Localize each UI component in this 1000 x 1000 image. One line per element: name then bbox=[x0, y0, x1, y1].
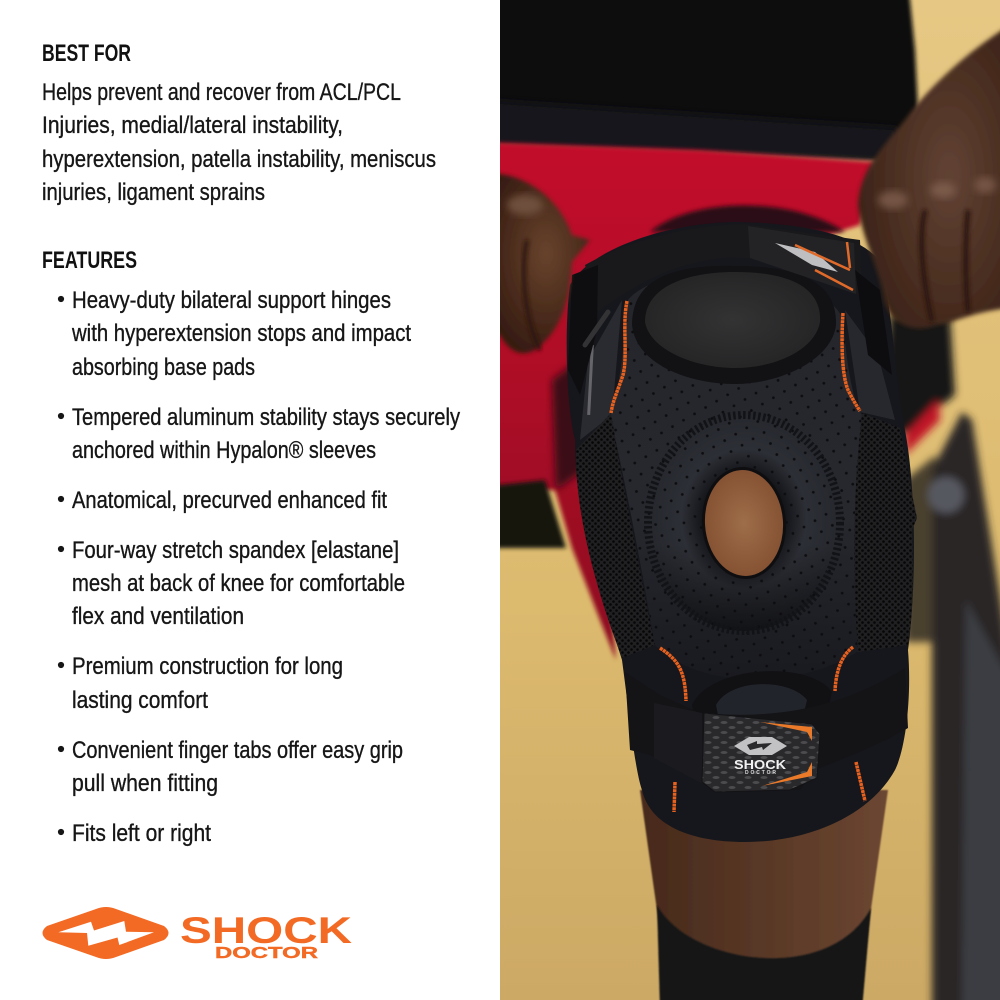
leg: black sock bbox=[657, 905, 871, 1000]
icon: lightning diamond bbox=[42, 907, 168, 959]
feature: finger tabs bbox=[58, 737, 403, 797]
feature: hinges: absorbing base pads bbox=[72, 354, 255, 381]
feature: hinges bbox=[58, 287, 411, 381]
wordmark: shock: SHOCK bbox=[180, 910, 352, 951]
right hand bbox=[858, 25, 1000, 328]
brace: buttress perforation bbox=[647, 415, 841, 631]
panel: white text column bbox=[0, 0, 500, 1000]
feature: spandex mesh: mesh at back of knee for comfortable bbox=[72, 570, 405, 597]
feature: precurved fit: Anatomical, precurved enhanced fit bbox=[72, 487, 387, 514]
brace: buttress shading bbox=[647, 415, 841, 631]
leg: lower leg skin bbox=[640, 790, 888, 975]
background: wood floor bbox=[500, 0, 1000, 1000]
icon: tab diamond bbox=[734, 737, 787, 755]
brace: top logo tab bbox=[748, 226, 856, 294]
background: thigh shadow above brace bbox=[650, 205, 845, 232]
heading: best for: BEST FOR bbox=[42, 40, 131, 67]
brace: patella buttress bbox=[647, 415, 841, 631]
wordmark: doctor: DOCTOR bbox=[215, 945, 318, 962]
tab wordmark: doctor: DOCTOR bbox=[745, 770, 776, 776]
photo: athlete fitting knee brace bbox=[480, 0, 1000, 1000]
background: gym equipment bbox=[880, 315, 1000, 1000]
background: red shorts bbox=[480, 142, 875, 660]
brace: front panel bbox=[610, 272, 862, 679]
list: features bbox=[58, 287, 460, 847]
feature: premium construction bbox=[58, 653, 343, 714]
background: shorts shadow bbox=[552, 360, 584, 490]
tab wordmark: shock: SHOCK bbox=[734, 757, 787, 772]
feature: spandex mesh: flex and ventilation bbox=[72, 603, 244, 630]
text block: best for description: Helps prevent and recover from ACL/PCL bbox=[42, 79, 401, 106]
brace: strap webbing bbox=[654, 703, 703, 784]
feature: hinges: Heavy-duty bilateral support hinges bbox=[72, 287, 391, 314]
logo: Shock Doctor bbox=[42, 907, 352, 962]
text block: best for description: Injuries, medial/lateral instability, bbox=[42, 112, 343, 139]
feature: spandex mesh: Four-way stretch spandex [elastane] bbox=[72, 537, 399, 564]
left hand bbox=[480, 172, 590, 353]
brace: orange stitching bbox=[611, 301, 865, 812]
brace: side panels bbox=[580, 300, 895, 440]
brace: top pad bbox=[632, 266, 836, 384]
feature: aluminum stays: Tempered aluminum stability stays securely bbox=[72, 404, 460, 431]
brace: top strap bbox=[568, 224, 892, 395]
background: dark bench bbox=[480, 480, 566, 548]
text block: best for description bbox=[42, 79, 436, 206]
feature: fits left or right: Fits left or right bbox=[72, 820, 211, 847]
text block: best for description: hyperextension, patella instability, meniscus bbox=[42, 146, 436, 173]
feature: aluminum stays: anchored within Hypalon® sleeves bbox=[72, 437, 376, 464]
brace: left mesh bbox=[576, 413, 655, 658]
feature: finger tabs: pull when fitting bbox=[72, 770, 218, 797]
feature: premium construction: lasting comfort bbox=[72, 687, 208, 714]
background: shirt hem shade bbox=[480, 100, 900, 160]
brace: right mesh bbox=[854, 413, 917, 652]
brace: lower pad bbox=[692, 671, 832, 730]
brace: perforation bbox=[610, 272, 862, 679]
brace: buttress stitching bbox=[648, 415, 840, 631]
background: black shirt bbox=[480, 0, 918, 160]
brace: lower strap bbox=[625, 668, 908, 790]
text block: best for description: injuries, ligament sprains bbox=[42, 179, 265, 206]
brace: main body bbox=[567, 222, 914, 842]
feature: premium construction: Premium construction for long bbox=[72, 653, 343, 680]
feature: spandex mesh bbox=[58, 537, 405, 630]
feature: finger tabs: Convenient finger tabs offer easy grip bbox=[72, 737, 403, 764]
feature: aluminum stays bbox=[58, 404, 460, 464]
brace: knee opening bbox=[700, 466, 788, 580]
brace: logo tab bbox=[702, 713, 820, 792]
feature: hinges: with hyperextension stops and impact bbox=[71, 320, 411, 347]
heading: features: FEATURES bbox=[42, 247, 137, 274]
